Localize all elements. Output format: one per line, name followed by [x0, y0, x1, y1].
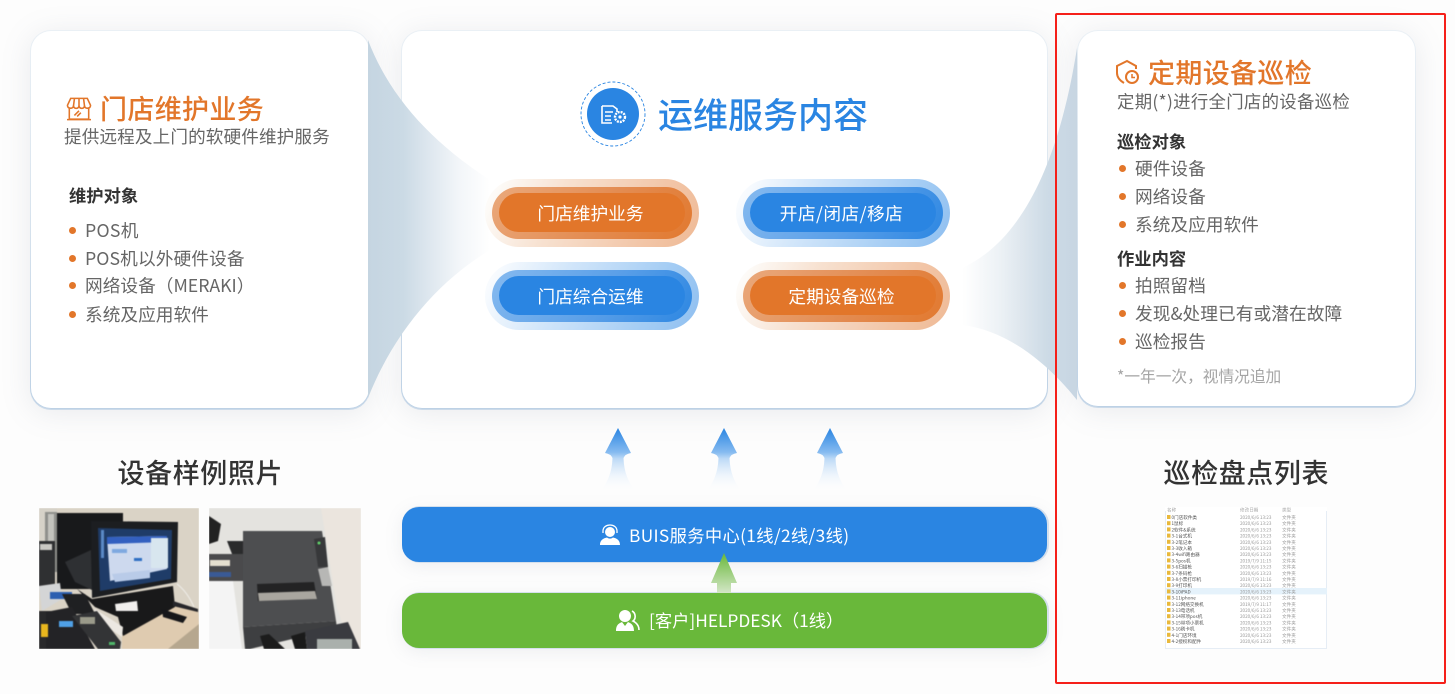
file list screenshot: 3-3收入箱 — [1172, 545, 1192, 552]
file list screenshot: 文件夹 — [1282, 582, 1296, 589]
button: periodic inspection — [736, 262, 950, 330]
file list screenshot: 3-13电话机 — [1172, 607, 1195, 614]
icon: shield clock — [1116, 60, 1139, 84]
file list screenshot: 文件夹 — [1282, 570, 1296, 577]
list: work content — [1119, 272, 1342, 354]
button: open close move store — [736, 179, 950, 247]
panel: store maintenance — [30, 30, 370, 409]
file list screenshot: 3-10iPAD — [1172, 588, 1191, 595]
icon: storefront — [66, 98, 92, 120]
subtitle: 定期(*)进行全门店的设备巡检 — [1117, 88, 1350, 114]
list: work content: 发现&处理已有或潜在故障 — [1135, 300, 1342, 326]
button: open close move store: 开店/闭店/移店 — [780, 200, 903, 226]
heading: inspection targets: 巡检对象 — [1117, 128, 1186, 152]
button: periodic inspection: 定期设备巡检 — [788, 283, 895, 309]
file list screenshot: 2020/6/6 13:23 — [1240, 614, 1272, 620]
file list screenshot: 2020/6/6 13:23 — [1240, 608, 1272, 614]
icon: headset agent — [600, 524, 620, 545]
right panel content — [1116, 52, 1350, 387]
arrow 1 — [600, 428, 636, 492]
file list screenshot: 2020/6/6 13:23 — [1240, 589, 1272, 595]
subtitle: 提供远程及上门的软硬件维护服务 — [64, 124, 330, 149]
list: inspection targets: 网络设备 — [1135, 182, 1206, 208]
file list screenshot: 2软件&系统 — [1172, 526, 1196, 533]
file list screenshot: 文件夹 — [1282, 632, 1296, 639]
photo: receipt printer — [209, 508, 361, 649]
file list screenshot: 3-7条码枪 — [1172, 570, 1192, 577]
file list screenshot: 3-4wifi路由器 — [1172, 551, 1200, 558]
list: inspection targets: 系统及应用软件 — [1135, 210, 1259, 236]
file list screenshot: 文件夹 — [1282, 576, 1296, 583]
label: customer helpdesk: [客户]HELPDESK（1线） — [649, 606, 843, 632]
file list screenshot: 文件夹 — [1282, 613, 1296, 620]
panel: service content — [400, 30, 1048, 409]
file list screenshot: 文件夹 — [1282, 619, 1296, 626]
file list screenshot: 3-9打印机 — [1172, 582, 1192, 589]
bar: BUIS service center — [402, 507, 1047, 562]
heading: sample photos: 设备样例照片 — [118, 452, 283, 491]
file list screenshot — [1165, 507, 1327, 649]
file list screenshot: 3-6扫描枪 — [1172, 564, 1192, 571]
file list screenshot: 2020/6/6 13:23 — [1240, 596, 1272, 602]
button: store maintenance: 门店维护业务 — [537, 200, 644, 226]
list: inspection targets: 硬件设备 — [1135, 154, 1206, 180]
list: work content: 巡检报告 — [1135, 328, 1206, 354]
file list screenshot: 2020/6/6 13:23 — [1240, 565, 1272, 571]
file list screenshot: 修改日期 — [1240, 507, 1259, 514]
list: maintenance targets: 网络设备（MERAKI） — [85, 272, 254, 298]
file list screenshot: 文件夹 — [1282, 564, 1296, 571]
file list screenshot: 3-11iphone — [1172, 595, 1196, 602]
red highlight frame — [1055, 13, 1446, 684]
bar: customer helpdesk — [402, 593, 1047, 648]
file list screenshot: 3-12网络交换机 — [1172, 601, 1204, 608]
file list screenshot: 2020/6/6 13:23 — [1240, 540, 1272, 546]
heading: maintenance targets: 维护对象 — [69, 182, 138, 207]
file list screenshot: 文件夹 — [1282, 595, 1296, 602]
list: maintenance targets: POS机以外硬件设备 — [85, 244, 245, 270]
file list screenshot: 2020/6/6 13:23 — [1240, 583, 1272, 589]
list: work content: 拍照留档 — [1135, 272, 1206, 298]
file list screenshot: 文件夹 — [1282, 626, 1296, 633]
file list screenshot: 2020/6/6 13:23 — [1240, 633, 1272, 639]
button: store maintenance — [485, 179, 699, 247]
icon: helpdesk users — [616, 610, 640, 631]
file list screenshot: 名称 — [1167, 507, 1177, 514]
icon: service gear document — [580, 82, 646, 146]
file list screenshot: 文件夹 — [1282, 601, 1296, 608]
file list screenshot: 2019/7/9 11:17 — [1240, 602, 1272, 608]
file list screenshot: 4-1门店环境 — [1172, 632, 1197, 639]
file list screenshot: 文件夹 — [1282, 557, 1296, 564]
file list screenshot: 文件夹 — [1282, 514, 1296, 521]
center title group — [580, 82, 868, 146]
file list screenshot: 文件夹 — [1282, 539, 1296, 546]
connector: left — [368, 40, 490, 398]
file list screenshot: 文件夹 — [1282, 533, 1296, 540]
arrow: helpdesk to service center — [711, 553, 737, 593]
label: BUIS service center: BUIS服务中心(1线/2线/3线) — [629, 522, 849, 547]
left panel content — [64, 88, 330, 326]
heading: inspection inventory list: 巡检盘点列表 — [1164, 452, 1329, 491]
file list screenshot: 文件夹 — [1282, 551, 1296, 558]
file list screenshot: 2020/6/6 13:23 — [1240, 571, 1272, 577]
file list screenshot: 2020/6/6 13:23 — [1240, 546, 1272, 552]
footnote: *一年一次，视情况追加 — [1117, 364, 1281, 387]
file list screenshot: 3-1台式机 — [1172, 533, 1192, 540]
list: maintenance targets: 系统及应用软件 — [85, 300, 209, 326]
file list screenshot: 3-5pos机 — [1172, 557, 1191, 564]
list: maintenance targets — [69, 216, 254, 326]
file list screenshot: 3-16刷卡机 — [1172, 626, 1195, 633]
file list screenshot: 文件夹 — [1282, 607, 1296, 614]
file list screenshot: 2020/6/6 13:23 — [1240, 527, 1272, 533]
file list screenshot: 2020/6/6 13:23 — [1240, 534, 1272, 540]
file list screenshot: 2020/6/6 13:23 — [1240, 521, 1272, 527]
list: maintenance targets: POS机 — [85, 216, 139, 242]
file list screenshot: 1鼠标 — [1172, 520, 1184, 527]
arrow 3 — [812, 428, 848, 492]
file list screenshot: 3-15带项小票机 — [1172, 619, 1204, 626]
file list screenshot: 文件夹 — [1282, 520, 1296, 527]
heading: periodic inspection: 定期设备巡检 — [1148, 52, 1312, 91]
file list screenshot: 2020/6/6 13:23 — [1240, 620, 1272, 626]
file list screenshot: 2020/6/6 13:23 — [1240, 627, 1272, 633]
photo: POS station — [39, 508, 199, 649]
file list screenshot: 2020/6/6 13:23 — [1240, 515, 1272, 521]
button: store general operations — [485, 262, 699, 330]
file list screenshot: 文件夹 — [1282, 588, 1296, 595]
panel: periodic inspection — [1076, 30, 1416, 407]
file list screenshot: 2019/7/9 11:16 — [1240, 577, 1272, 583]
connector: right — [962, 48, 1077, 400]
file list screenshot: 2020/6/6 13:23 — [1240, 552, 1272, 558]
list: inspection targets — [1119, 154, 1259, 236]
file list screenshot: 0门店软件类 — [1172, 514, 1197, 521]
file list screenshot: 文件夹 — [1282, 526, 1296, 533]
heading: store maintenance: 门店维护业务 — [100, 88, 264, 127]
arrow 2 — [706, 428, 742, 492]
file list screenshot: 2019/7/9 11:15 — [1240, 558, 1272, 564]
arrows: up to service content — [605, 428, 843, 480]
file list screenshot: 2020/6/6 13:23 — [1240, 639, 1272, 645]
file list screenshot: 3-2笔记本 — [1172, 539, 1192, 546]
file list screenshot: 文件夹 — [1282, 545, 1296, 552]
file list screenshot: 文件夹 — [1282, 638, 1296, 645]
button: store general operations: 门店综合运维 — [537, 283, 644, 309]
file list screenshot: 类型 — [1282, 507, 1292, 514]
file list screenshot: 3-8小票打印机 — [1172, 576, 1202, 583]
file list screenshot: 3-14带项pos机 — [1172, 613, 1203, 620]
heading: service content: 运维服务内容 — [658, 88, 868, 139]
file list screenshot: 4-2授权和配件 — [1172, 638, 1202, 645]
heading: work content: 作业内容 — [1117, 245, 1186, 270]
